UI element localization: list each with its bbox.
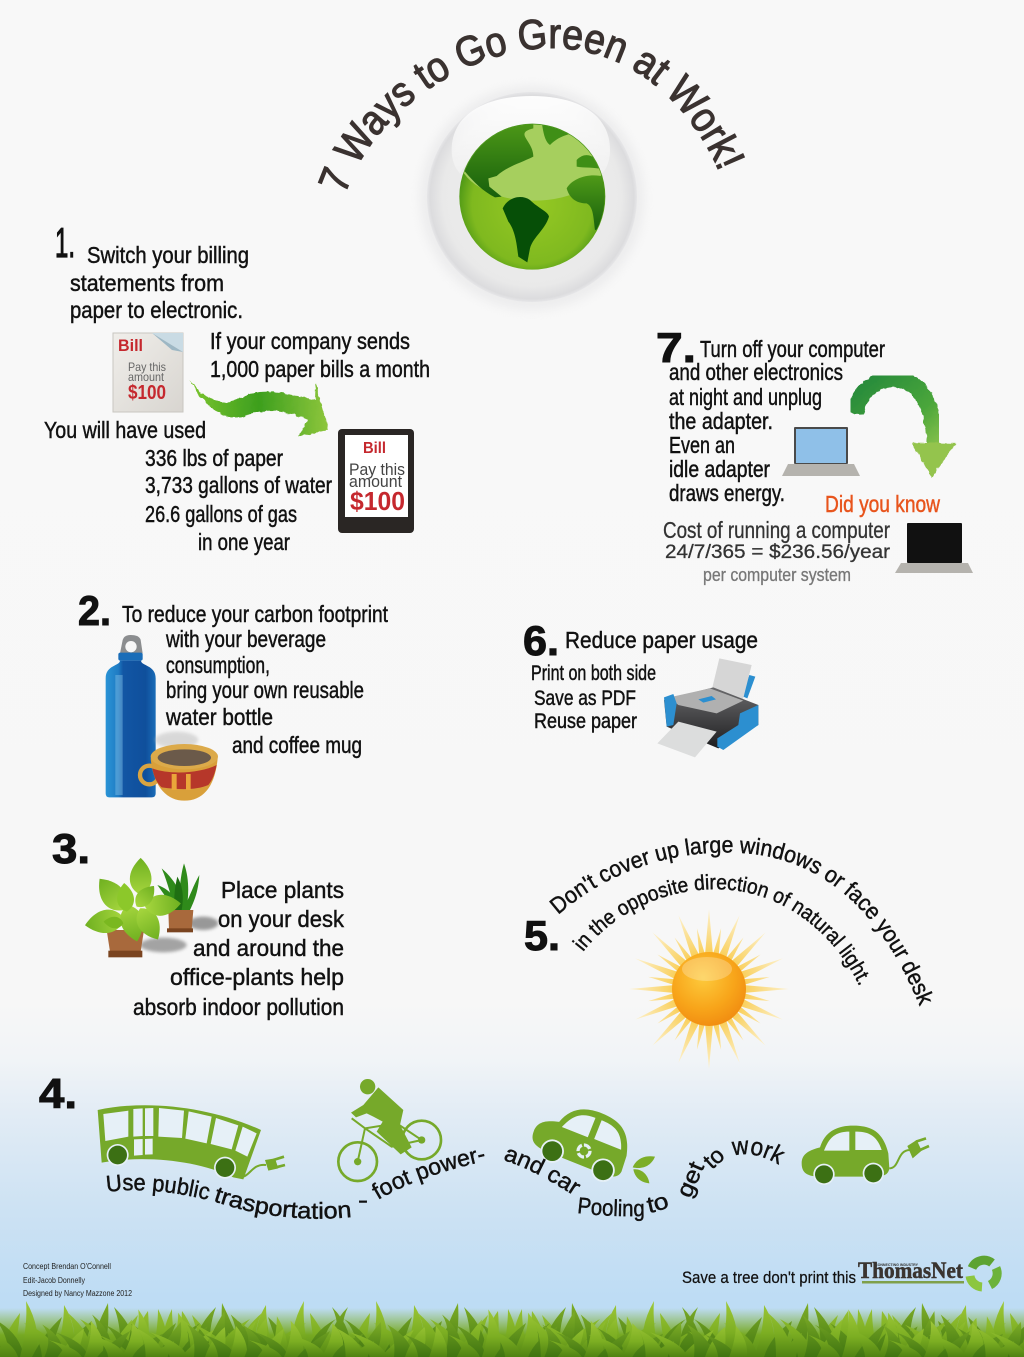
icon: laptop off — [895, 523, 973, 573]
number 1: 1. — [55, 219, 75, 266]
step 2 text: To reduce your carbon footprint — [122, 601, 389, 627]
curved caption: - — [358, 1187, 368, 1213]
step 7 text: and other electronics — [669, 359, 843, 385]
number 6: 6. — [523, 617, 559, 664]
step 1 text: 1,000 paper bills a month — [210, 356, 430, 382]
step 1 text: in one year — [198, 529, 290, 555]
step 7 text: the adapter. — [669, 408, 773, 434]
icon: paper bill: $100 — [128, 382, 166, 404]
step 1 text: Switch your billing — [87, 242, 249, 268]
icon: tablet bill: amount — [349, 472, 402, 491]
step 1 text: 26.6 gallons of gas — [145, 501, 297, 527]
step 1 text: 3,733 gallons of water — [145, 472, 332, 498]
step 2 text: bring your own reusable — [166, 677, 364, 703]
icon: tablet bill: $100 — [350, 486, 405, 516]
icon: printer — [657, 658, 758, 757]
cost text: Cost of running a computer — [663, 517, 890, 543]
arrow: paper to tablet — [189, 380, 328, 437]
credits — [23, 1262, 132, 1298]
step 7 text: at night and unplug — [669, 384, 822, 410]
curved caption: foot power- — [372, 1150, 484, 1200]
icon: tablet bill — [338, 429, 414, 533]
curved caption: to — [703, 1150, 724, 1168]
step 3 text: absorb indoor pollution — [133, 994, 344, 1020]
logo: ThomasNet: ThomasNet — [858, 1258, 963, 1283]
panel: step 7 turn off electronics — [656, 324, 973, 585]
curved caption: trasportation — [215, 1188, 351, 1220]
step 7 text: draws energy. — [669, 480, 785, 506]
icon: electric car — [802, 1126, 929, 1185]
curved caption — [106, 1140, 786, 1222]
credits: Designed by Nancy Mazzone 2012 — [23, 1289, 132, 1298]
step 7 text: Even an — [669, 432, 735, 458]
step 1 text: 336 lbs of paper — [145, 445, 283, 471]
icon: tablet bill: Pay this — [349, 460, 405, 479]
step 7 text: Turn off your computer — [700, 336, 885, 362]
number 5: 5. — [524, 912, 560, 959]
arrow: curved green — [855, 379, 956, 477]
step 1 text — [44, 242, 430, 555]
icon: globe in glossy plate — [420, 86, 644, 310]
step 1 text: You will have used — [44, 417, 206, 443]
curved caption: to — [646, 1196, 668, 1213]
icon: paper bill: Bill — [118, 336, 143, 355]
title: 7 Ways to Go Green at Work! — [318, 19, 746, 190]
cost text: per computer system — [703, 565, 851, 585]
icon: electric bus — [98, 1105, 285, 1179]
number 4: 4. — [39, 1070, 77, 1117]
credits: Edit-Jacob Donnelly — [23, 1276, 85, 1285]
number 7: 7. — [656, 324, 696, 371]
icon: recycling car — [525, 1092, 655, 1189]
logo: ThomasNet: CONNECTING INDUSTRY — [875, 1263, 919, 1267]
cost text — [663, 517, 891, 585]
panel: step 3 plants — [52, 825, 344, 1020]
step 6 text: Save as PDF — [534, 687, 636, 710]
step 2 text: water bottle — [165, 704, 273, 730]
step 6 text: Print on both side — [531, 662, 656, 685]
step 1 text: statements from — [70, 270, 224, 296]
panel: step 4 transportation — [39, 1070, 930, 1222]
icon: recycle — [970, 1260, 997, 1287]
number 3: 3. — [52, 825, 90, 872]
curved caption: Use public — [106, 1174, 210, 1200]
grass — [0, 1301, 1024, 1357]
icon: laptop on — [782, 427, 860, 476]
step 3 text: on your desk — [218, 906, 344, 932]
step 2 text — [122, 601, 389, 758]
step 3 text: and around the — [193, 935, 344, 961]
icon: coffee mug — [140, 732, 218, 801]
step 2 text: consumption, — [166, 652, 270, 678]
curved caption: Pooling — [578, 1197, 644, 1222]
step 6 text — [531, 627, 758, 733]
step 7 text: idle adapter — [669, 456, 770, 482]
curved step 5 text: Don't cover up large windows or face your desk — [549, 838, 932, 1007]
curved caption: and car — [504, 1150, 581, 1194]
step 2 text: and coffee mug — [232, 732, 362, 758]
curved caption: get — [680, 1161, 705, 1198]
step 3 text — [133, 877, 344, 1020]
number 2: 2. — [78, 587, 111, 634]
icon: potted plants — [83, 858, 218, 957]
icon: tablet bill: Bill — [363, 440, 386, 457]
step 7 text — [669, 336, 885, 506]
step 1 text: If your company sends — [210, 328, 410, 354]
step 2 text: with your beverage — [165, 626, 326, 652]
curved caption: work — [731, 1140, 786, 1165]
callout: did you know: Did you know — [825, 491, 940, 517]
step 6 text: Reduce paper usage — [565, 627, 758, 653]
cost text: 24/7/365 = $236.56/year — [665, 542, 891, 563]
panel: step 1 billing — [44, 219, 430, 555]
icon: paper bill: Pay this — [128, 360, 166, 374]
icon: cyclist — [338, 1079, 441, 1181]
panel: step 5 natural light — [524, 838, 932, 1068]
panel: step 2 reusable bottle — [78, 587, 389, 801]
icon: paper bill: amount — [128, 370, 165, 384]
icon: sun — [629, 909, 789, 1069]
save a tree note: Save a tree don't print this — [682, 1268, 856, 1287]
panel: step 6 reduce paper — [523, 617, 758, 757]
step 6 text: Reuse paper — [534, 710, 637, 733]
step 3 text: office-plants help — [170, 964, 344, 990]
icon: water bottle — [106, 635, 156, 797]
curved step 5 text: in the opposite direction of natural light. — [572, 874, 868, 986]
step 1 text: paper to electronic. — [70, 297, 243, 323]
icon: paper bill — [113, 333, 183, 412]
credits: Concept Brendan O'Connell — [23, 1262, 111, 1271]
step 3 text: Place plants — [221, 877, 344, 903]
